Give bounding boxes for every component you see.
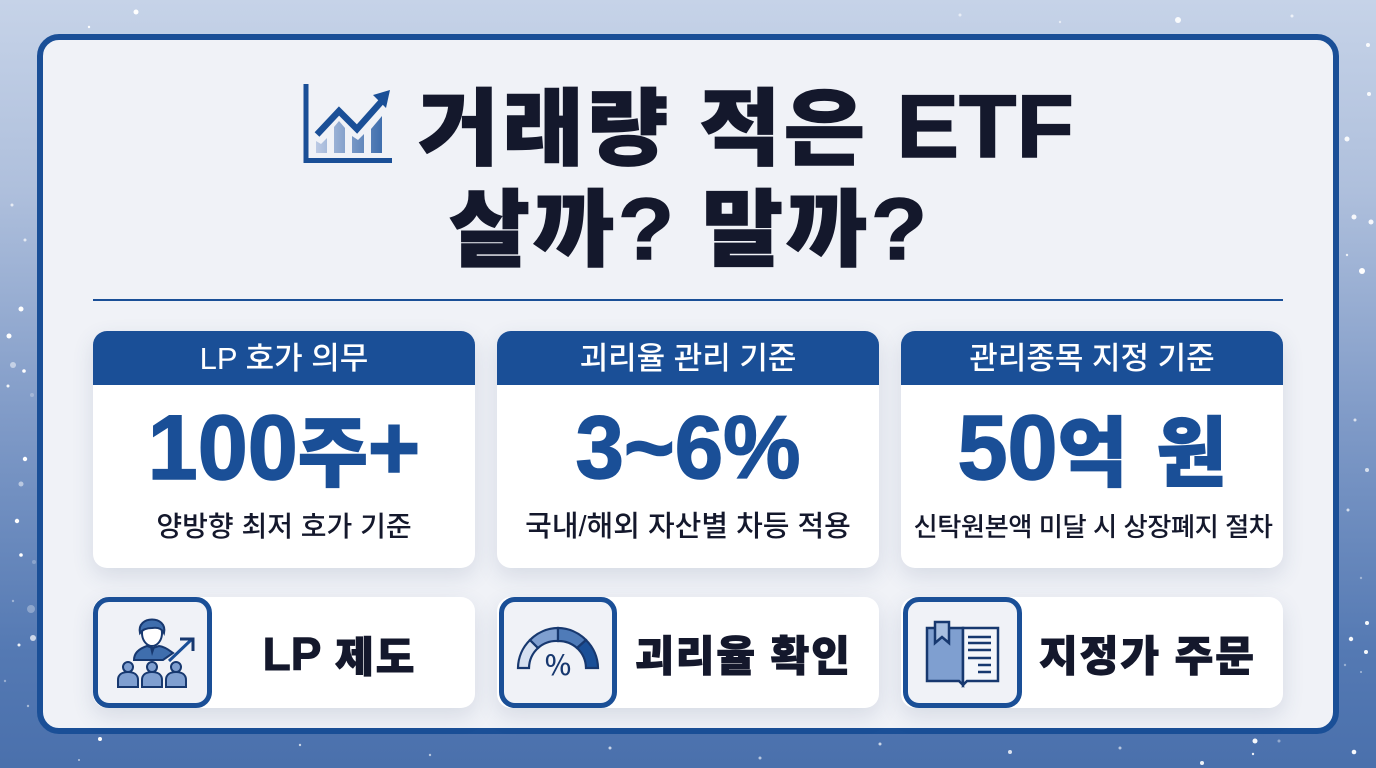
value: 3~6% <box>576 399 800 497</box>
description: 신탁원본액 미달 시 상장폐지 절차 <box>914 512 1272 542</box>
action: 지정가 주문 <box>901 597 1283 708</box>
title: 살까? 말까? <box>449 181 927 278</box>
icon: LP people <box>93 597 212 708</box>
title: 거래량 적은 ETF <box>418 76 1074 176</box>
value <box>148 398 420 500</box>
header: LP 호가 의무 <box>200 341 368 376</box>
value: 억 원 <box>1058 412 1227 497</box>
header <box>497 331 879 385</box>
divider <box>93 299 1283 301</box>
description: 양방향 최저 호가 기준 <box>156 511 412 542</box>
description: 국내/해외 자산별 차등 적용 <box>525 511 851 543</box>
value: 100 <box>148 398 298 500</box>
panel: 관리종목 지정 기준 <box>901 331 1283 568</box>
icon: open book <box>903 597 1022 708</box>
value: 50 <box>957 398 1058 500</box>
label: 괴리율 확인 <box>635 633 852 680</box>
title <box>418 76 1074 278</box>
label: 지정가 주문 <box>1039 633 1256 680</box>
label: LP 제도 <box>263 628 416 681</box>
value: + <box>368 398 420 500</box>
value: 주 <box>298 412 368 497</box>
header: 관리종목 지정 기준 <box>969 341 1215 376</box>
header: 괴리율 관리 기준 <box>580 341 796 376</box>
icon: gauge: % <box>545 644 571 684</box>
panel: 괴리율 관리 기준 <box>497 331 879 568</box>
title icon: rising chart <box>304 84 392 163</box>
icon: gauge <box>499 597 617 708</box>
value <box>957 398 1227 500</box>
header <box>901 331 1283 385</box>
action: 괴리율 확인 <box>497 597 879 708</box>
action: LP 제도 <box>93 597 475 708</box>
panel: LP 호가 의무 <box>93 331 475 568</box>
header <box>93 331 475 385</box>
